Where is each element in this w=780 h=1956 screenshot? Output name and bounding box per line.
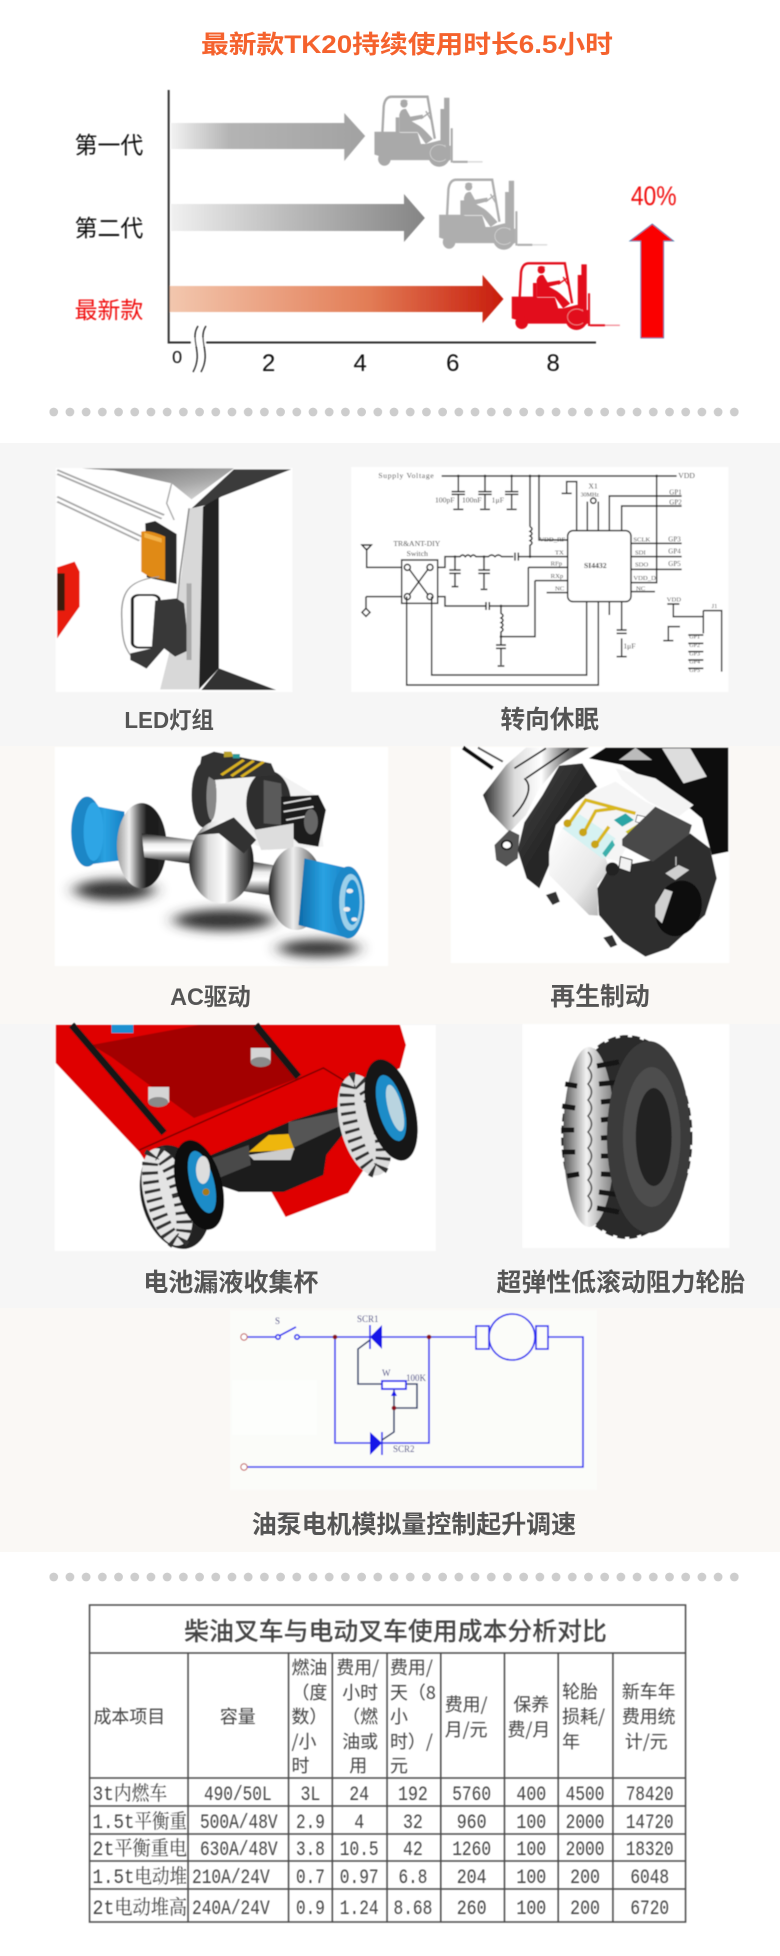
chart axes	[169, 90, 596, 342]
table header: 损耗/	[562, 1703, 605, 1729]
table header: 元	[390, 1752, 408, 1778]
row: 1.5t counterbalance: 960	[457, 1811, 487, 1834]
panel: steering sleep circuit: RFp	[551, 560, 563, 567]
row: 1.5t counterbalance: 32	[403, 1811, 423, 1834]
table header: 年	[562, 1728, 580, 1754]
row: 1.5t electric stacker: 0.7	[296, 1866, 325, 1889]
table header: 新车年	[622, 1678, 676, 1704]
panel: steering sleep circuit: TR&ANT-DIY	[393, 539, 441, 548]
panel: steering sleep circuit: GP3	[689, 651, 700, 657]
table header	[94, 1654, 676, 1778]
axis ticks: 8	[547, 350, 560, 377]
axis ticks: 2	[262, 350, 275, 377]
row: 2t electric stacker: 1.24	[340, 1897, 379, 1920]
shadow	[75, 879, 358, 957]
panel: steering sleep circuit: VDD_D	[633, 575, 656, 582]
row: 2t counterbalance: 3.8	[296, 1838, 325, 1861]
panel: steering sleep circuit: NC	[555, 586, 565, 593]
panel: oil pump motor circuit: SCR2	[393, 1444, 414, 1454]
panel: oil pump motor circuit: 100K	[406, 1373, 426, 1383]
table header: 轮胎	[562, 1678, 598, 1704]
right wheel	[328, 1068, 403, 1182]
label: latest model: 最新款	[75, 291, 143, 325]
motor	[192, 760, 323, 850]
caption: oil pump analog control: 油泵电机模拟量控制起升调速	[252, 1511, 576, 1539]
panel: LED light	[56, 468, 293, 692]
row: 1.5t electric stacker	[93, 1865, 669, 1889]
table header: （度	[292, 1679, 327, 1705]
icon: grey forklift two	[439, 180, 547, 250]
axis ticks	[172, 347, 560, 377]
caption: leak collection: 电池漏液收集杯	[143, 1269, 318, 1297]
table header: 容量	[220, 1703, 256, 1729]
panel: steering sleep circuit: GP2	[689, 643, 700, 649]
axle	[142, 833, 194, 864]
caption: steering sleep: 转向休眠	[500, 706, 599, 734]
arrow: first generation	[171, 113, 365, 161]
panel: regenerative braking motor	[451, 747, 729, 963]
panel: steering sleep circuit: RXp	[551, 573, 564, 580]
panel: low rolling resistance tire	[522, 1024, 729, 1248]
table header: （燃	[342, 1703, 378, 1729]
table header: 油或	[342, 1728, 378, 1754]
table header: 时	[292, 1752, 309, 1778]
table header: 时）/	[390, 1728, 433, 1754]
panel: steering sleep circuit: SDI	[635, 550, 646, 557]
table header: 计/元	[625, 1728, 668, 1754]
panel: steering sleep circuit: GP5	[689, 668, 700, 674]
caption: LED lights: LED灯组	[124, 707, 214, 733]
row: 3t combustion: 5760	[452, 1783, 491, 1806]
table header: 费用/	[445, 1691, 488, 1717]
table header: /小	[292, 1728, 317, 1754]
row: 2t counterbalance: 1260	[452, 1838, 491, 1861]
arrow: latest model	[169, 275, 503, 323]
panel: steering sleep circuit: 1μF	[623, 641, 636, 650]
row: 3t combustion: 192	[398, 1783, 428, 1806]
panel: steering sleep circuit: NC	[636, 586, 646, 593]
caption: low rolling tire: 超弹性低滚动阻力轮胎	[497, 1269, 745, 1297]
table header: 月/元	[445, 1716, 488, 1742]
panel: oil pump motor circuit: W	[382, 1368, 391, 1378]
panel: steering sleep circuit: X1	[588, 481, 598, 490]
panel: steering sleep circuit: J1	[712, 603, 717, 610]
row: 3t combustion	[93, 1782, 674, 1806]
table grid	[90, 1605, 686, 1922]
row: 2t electric stacker: 200	[570, 1897, 600, 1920]
row: 3t combustion: 4500	[566, 1783, 604, 1806]
panel: steering sleep circuit: GP4	[689, 660, 700, 666]
row: 1.5t counterbalance	[93, 1810, 674, 1834]
caption: regenerative braking: 再生制动	[550, 983, 650, 1011]
row: 1.5t electric stacker: 200	[570, 1866, 600, 1889]
table header: 用	[349, 1752, 367, 1778]
panel: oil pump motor circuit: S	[275, 1316, 280, 1326]
table title: 柴油叉车与电动叉车使用成本分析对比	[184, 1612, 607, 1648]
row: 1.5t electric stacker: 210A/24V	[192, 1866, 270, 1889]
panel: steering sleep circuit: GP5	[668, 560, 681, 568]
panel: oil pump motor circuit: SCR1	[357, 1314, 378, 1324]
panel: steering sleep circuit: 30MHz	[581, 493, 599, 499]
row: 2t counterbalance: 630A/48V	[200, 1838, 278, 1861]
row: 1.5t counterbalance: 2000	[566, 1811, 604, 1834]
chart: battery runtime by generation	[75, 90, 677, 377]
row: 2t counterbalance: 2t平衡重电	[93, 1837, 187, 1861]
row: 1.5t electric stacker: 100	[516, 1866, 546, 1889]
panel: steering sleep circuit: VDD	[667, 596, 681, 603]
panel: steering sleep circuit: Switch	[407, 549, 428, 558]
arrow: second generation	[171, 194, 425, 242]
panel: oil pump motor circuit	[230, 1310, 597, 1490]
table header: 小时	[342, 1679, 378, 1705]
row: 2t electric stacker: 0.9	[296, 1897, 325, 1920]
row: 2t counterbalance: 2000	[566, 1838, 604, 1861]
row: 2t electric stacker: 6720	[630, 1897, 669, 1920]
panel: steering sleep circuit: VDD	[678, 471, 695, 480]
panel: AC drive axle	[55, 747, 388, 966]
axis break mark	[191, 326, 206, 372]
table header: 数）	[292, 1703, 327, 1729]
panel: steering sleep circuit: GP2	[669, 499, 682, 507]
left wheel	[85, 805, 124, 865]
row: 1.5t electric stacker: 6048	[630, 1866, 669, 1889]
panel: steering sleep circuit: 100nF	[462, 496, 482, 505]
table header: 燃油	[292, 1654, 327, 1680]
panel: steering sleep circuit: SI4432	[584, 561, 607, 570]
row: 2t counterbalance	[93, 1837, 674, 1861]
title: 最新款TK20持续使用时长6.5小时	[201, 31, 613, 59]
table header: 费用/	[336, 1654, 379, 1680]
panel: steering sleep circuit: Supply Voltage	[378, 471, 434, 480]
row: 1.5t electric stacker: 1.5t电动堆	[93, 1865, 187, 1889]
table header: 费用/	[390, 1654, 433, 1680]
axis ticks: 6	[446, 350, 459, 377]
icon: grey forklift one	[374, 97, 483, 167]
row: 2t counterbalance: 10.5	[340, 1838, 379, 1861]
row: 2t electric stacker: 8.68	[394, 1897, 432, 1920]
panel: steering sleep circuit: GP4	[668, 547, 681, 555]
row: 2t counterbalance: 42	[403, 1838, 423, 1861]
row: 3t combustion: 3L	[300, 1783, 320, 1806]
row: 1.5t counterbalance: 100	[516, 1811, 546, 1834]
table header: 费用统	[622, 1703, 676, 1729]
row: 1.5t electric stacker: 6.8	[398, 1866, 427, 1889]
row: 1.5t electric stacker: 0.97	[340, 1866, 379, 1889]
panel: steering sleep circuit: VDD_RF	[539, 537, 566, 544]
table header: 保养	[513, 1691, 549, 1717]
icon: red forklift	[512, 263, 620, 330]
row: 3t combustion: 490/50L	[204, 1783, 272, 1806]
row: 2t electric stacker: 240A/24V	[192, 1897, 270, 1920]
left wheel	[129, 1137, 221, 1257]
panel: steering sleep circuit: SDO	[635, 562, 648, 569]
row: 1.5t counterbalance: 1.5t平衡重	[93, 1810, 187, 1834]
table header: 天（8	[390, 1679, 436, 1705]
right wheel	[269, 847, 323, 930]
row: 2t electric stacker: 100	[516, 1897, 546, 1920]
table: diesel vs electric forklift cost	[90, 1605, 686, 1922]
caption: AC drive: AC驱动	[170, 984, 251, 1011]
panel: steering sleep circuit: SCLK	[633, 537, 651, 544]
row: 2t counterbalance: 18320	[626, 1838, 674, 1861]
row: 1.5t counterbalance: 500A/48V	[200, 1811, 278, 1834]
panel: steering sleep circuit: 1μF	[492, 496, 504, 505]
row: 2t electric stacker: 2t电动堆高	[93, 1896, 187, 1920]
row: 1.5t counterbalance: 2.9	[296, 1811, 325, 1834]
dotted divider	[49, 407, 739, 417]
dotted divider	[49, 1572, 739, 1582]
row: 2t counterbalance: 100	[516, 1838, 546, 1861]
table header: 成本项目	[94, 1703, 165, 1729]
row: 2t electric stacker: 260	[457, 1897, 487, 1920]
row: 3t combustion: 78420	[626, 1783, 674, 1806]
axis ticks: 4	[354, 350, 367, 377]
label: second generation: 第二代	[75, 209, 143, 243]
table header: 费/月	[507, 1716, 550, 1742]
panel: steering sleep circuit: GP1	[689, 635, 700, 641]
row: 1.5t counterbalance: 4	[354, 1811, 364, 1834]
panel: steering sleep circuit: GP3	[668, 536, 681, 544]
row: 1.5t counterbalance: 14720	[626, 1811, 674, 1834]
axis ticks: 0	[172, 347, 182, 367]
table header: 小	[390, 1703, 408, 1729]
panel: steering sleep circuit: 100pF	[435, 496, 455, 505]
row: 3t combustion: 24	[349, 1783, 369, 1806]
row: 3t combustion: 400	[516, 1783, 546, 1806]
row: 3t combustion: 3t内燃车	[93, 1782, 167, 1806]
panel: steering sleep circuit: TX	[555, 550, 564, 557]
panel: steering sleep circuit: GP1	[669, 489, 682, 497]
panel: battery leak collection tray	[55, 1025, 436, 1257]
label: first generation: 第一代	[75, 126, 143, 160]
callout: 40 percent: 40%	[631, 181, 677, 211]
row: 2t electric stacker	[93, 1896, 669, 1920]
row: 1.5t electric stacker: 204	[457, 1866, 487, 1889]
panel: steering sleep circuit	[351, 467, 728, 692]
arrow: up increase	[630, 224, 674, 338]
